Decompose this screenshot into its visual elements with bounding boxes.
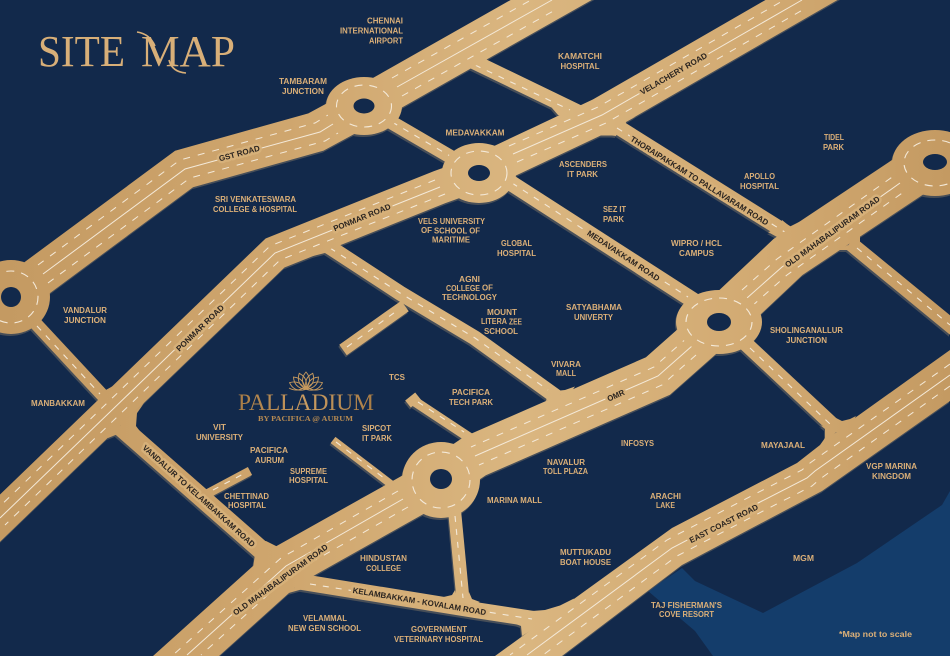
project logo: Palladium: PALLADIUM — [238, 390, 374, 415]
label: Agni College of Technology: TECHNOLOGY — [442, 292, 497, 302]
label: Ascenders IT Park — [559, 159, 607, 179]
label: Pacifica Aurum: PACIFICA — [250, 445, 288, 455]
label: Tambaram Junction: JUNCTION — [282, 86, 324, 96]
label: Vels University School of Maritime: MARITIME — [432, 234, 470, 244]
label: Vels University School of Maritime — [418, 216, 485, 244]
label: Tidel Park: TIDEL — [824, 132, 844, 142]
label: Satyabhama University: UNIVERTY — [574, 312, 613, 322]
label: Agni College of Technology: AGNI — [459, 274, 480, 284]
label: Sipcot IT Park: IT PARK — [362, 433, 393, 443]
road: inner branch — [343, 306, 405, 350]
label: Manbakkam: MANBAKKAM — [31, 398, 85, 408]
label: Mount Litera Zee School: ZEE — [509, 316, 522, 326]
label: Kamatchi Hospital — [558, 51, 602, 71]
roundabout: Tambaram — [326, 77, 402, 135]
label: Government Veterinary Hospital: VETERINARY HOSPITAL — [394, 634, 483, 644]
label: Marina Mall: MARINA MALL — [487, 495, 542, 505]
road label: Thoraipakkam to Pallavaram Road: THORAIPAKKAM TO PALLAVARAM ROAD — [629, 134, 770, 227]
label: Tambaram Junction — [279, 76, 327, 96]
label: Apollo Hospital: HOSPITAL — [740, 181, 779, 191]
label: Muttukadu Boat House: MUTTUKADU — [560, 547, 611, 557]
label: Satyabhama University — [566, 302, 622, 322]
label: Taj Fisherman's Cove Resort: COVE RESORT — [659, 609, 715, 619]
label: SEZ IT Park — [603, 204, 627, 224]
road: Ponmar Road — [0, 173, 479, 547]
label: Government Veterinary Hospital — [394, 624, 483, 644]
roundabout: Sholinganallur — [676, 290, 762, 354]
label: Navalur Toll Plaza: NAVALUR — [547, 457, 586, 467]
road: Chettinad branch — [205, 471, 250, 495]
label: Kamatchi Hospital: KAMATCHI — [558, 51, 602, 61]
label: Government Veterinary Hospital: GOVERNMENT — [411, 624, 468, 634]
label: VIT University: UNIVERSITY — [196, 432, 243, 442]
label: Hindustan College: COLLEGE — [366, 563, 401, 573]
label: Apollo Hospital — [740, 171, 779, 191]
label: Sholinganallur Junction: SHOLINGANALLUR — [770, 325, 844, 335]
label: Agni College of Technology: OF — [482, 282, 493, 292]
road label: Old Mahabalipuram Road north: OLD MAHABALIPURAM ROAD — [783, 194, 882, 269]
label: Sholinganallur Junction — [770, 325, 844, 345]
label: Global Hospital: GLOBAL — [501, 238, 532, 248]
label: Pacifica Tech Park — [449, 387, 494, 407]
road: Ponmar to OMR inner road — [325, 244, 558, 398]
road: East Coast Road — [495, 350, 950, 656]
label: Ascenders IT Park: ASCENDERS — [559, 159, 607, 169]
label: Pacifica Aurum: AURUM — [255, 455, 284, 465]
road: Vandalur junction link — [25, 312, 105, 398]
label: Hindustan College: HINDUSTAN — [360, 553, 407, 563]
label: Vandalur Junction: JUNCTION — [64, 315, 106, 325]
label: Global Hospital — [497, 238, 536, 258]
road label: OMR: OMR — [606, 388, 626, 403]
label: Vivara Mall — [551, 359, 581, 378]
label: Muttukadu Boat House: BOAT HOUSE — [560, 557, 611, 567]
label: Tidel Park: PARK — [823, 142, 845, 152]
road: Sipcot branch — [333, 440, 392, 485]
label: Tidel Park — [823, 132, 845, 152]
label: Vandalur Junction — [63, 305, 108, 325]
label: Sipcot IT Park: SIPCOT — [362, 423, 392, 433]
label: Kamatchi Hospital: HOSPITAL — [560, 61, 600, 71]
project logo: Palladium — [238, 372, 374, 423]
label: Vels University School of Maritime: OF — [421, 225, 432, 235]
label: Mount Litera Zee School: MOUNT — [487, 307, 518, 317]
road labels — [141, 51, 882, 617]
label: Vels University School of Maritime: VELS UNIVERSITY — [418, 216, 485, 226]
label: Sri Venkateswara College & Hospital: SRI VENKATESWARA — [215, 194, 296, 204]
label: Vivara Mall: MALL — [556, 368, 576, 378]
label: Taj Fisherman's Cove Resort — [651, 600, 722, 619]
label: Sipcot IT Park — [362, 423, 393, 443]
label: VGP Marina Kingdom — [866, 461, 917, 481]
label: Velammal New Gen School: NEW GEN SCHOOL — [288, 623, 361, 633]
label: Arachi Lake — [650, 491, 681, 510]
road label: East Coast Road: EAST COAST ROAD — [688, 502, 760, 545]
label: Wipro / HCL Campus: CAMPUS — [679, 248, 714, 258]
label: Ascenders IT Park: IT PARK — [567, 169, 599, 179]
label: Chennai International Airport: AIRPORT — [369, 36, 404, 46]
road: OMR — [441, 322, 719, 479]
label: Vels University School of Maritime: SCHOOL OF — [434, 226, 480, 236]
road label: GST Road: GST ROAD — [218, 144, 261, 163]
road: Pacifica Tech Park branch — [408, 396, 470, 438]
road: Old Mahabalipuram Road south — [153, 460, 452, 656]
road: GST Road — [11, 0, 590, 297]
label: Chettinad Hospital: CHETTINAD — [224, 491, 269, 501]
road: Medavakkam Road — [500, 176, 705, 308]
label: Apollo Hospital: APOLLO — [744, 171, 775, 181]
title: SITE — [38, 27, 125, 76]
road label: Vandalur to Kelambakkam Road: VANDALUR TO KELAMBAKKAM ROAD — [141, 443, 257, 549]
road label: Ponmar Road lower: PONMAR ROAD — [174, 303, 226, 353]
footnote: map not to scale: *Map not to scale — [839, 629, 912, 639]
label: Satyabhama University: SATYABHAMA — [566, 302, 622, 312]
label: MGM: MGM — [793, 553, 814, 563]
label: Medavakkam: MEDAVAKKAM — [446, 128, 504, 138]
road: Tambaram to Medavakkam link — [384, 118, 456, 160]
label: VGP Marina Kingdom: VGP MARINA — [866, 461, 917, 471]
road: Old Mahabalipuram Road north — [719, 159, 935, 322]
label: Navalur Toll Plaza — [543, 457, 588, 476]
label: Global Hospital: HOSPITAL — [497, 248, 536, 258]
label: Chennai International Airport: CHENNAI — [367, 16, 403, 26]
label: Infosys: INFOSYS — [621, 438, 654, 448]
sea — [648, 491, 950, 656]
label: Mount Litera Zee School: SCHOOL — [484, 326, 518, 336]
label: Vivara Mall: VIVARA — [551, 359, 581, 369]
road label: Ponmar Road upper: PONMAR ROAD — [332, 202, 392, 233]
label: Sholinganallur Junction: JUNCTION — [786, 335, 827, 345]
label: Sri Venkateswara College & Hospital — [213, 194, 297, 214]
label: Wipro / HCL Campus: WIPRO / HCL — [671, 238, 722, 248]
road: Kamatchi link — [462, 56, 582, 114]
roundabout: north-east — [892, 130, 950, 196]
label: SEZ IT Park: PARK — [603, 214, 625, 224]
roundabout: Medavakkam — [442, 143, 516, 203]
label: Chettinad Hospital — [224, 491, 269, 510]
road: Shollinganallur to ECR link — [745, 343, 838, 430]
project logo: Palladium: BY PACIFICA @ AURUM — [258, 414, 353, 423]
label: Supreme Hospital: HOSPITAL — [289, 475, 328, 485]
label: TCS: TCS — [389, 372, 405, 382]
label: Velammal New Gen School — [288, 613, 361, 633]
label: Supreme Hospital: SUPREME — [290, 466, 327, 476]
label: Hindustan College — [360, 553, 407, 573]
title: MAP — [141, 27, 235, 76]
label: SEZ IT Park: SEZ IT — [603, 204, 627, 214]
label: Mount Litera Zee School — [481, 307, 522, 336]
road label: Medavakkam Road: MEDAVAKKAM ROAD — [585, 229, 661, 283]
label: Pacifica Aurum — [250, 445, 288, 465]
road: Velachery Road — [479, 0, 850, 173]
road junction fillets — [97, 104, 860, 636]
label: Mayajaal: MAYAJAAL — [761, 440, 805, 450]
label: VIT University — [196, 422, 243, 442]
label: Vandalur Junction: VANDALUR — [63, 305, 108, 315]
label: Chettinad Hospital: HOSPITAL — [228, 500, 266, 510]
road: Navalur south link — [454, 505, 464, 610]
road: OMR to ECR link — [845, 237, 950, 335]
label: Navalur Toll Plaza: TOLL PLAZA — [543, 466, 588, 476]
label: Arachi Lake: ARACHI — [650, 491, 681, 501]
icon: lotus — [288, 372, 324, 393]
label: Tambaram Junction: TAMBARAM — [279, 76, 327, 86]
label: Supreme Hospital — [289, 466, 328, 485]
title — [38, 27, 235, 76]
label: Pacifica Tech Park: TECH PARK — [449, 397, 494, 407]
label: Chennai International Airport: INTERNATIONAL — [340, 26, 403, 36]
label: Chennai International Airport — [340, 16, 404, 46]
road: Thoraipakkam to Pallavaram Road — [610, 122, 795, 238]
road label: Old Mahabalipuram Road south: OLD MAHABALIPURAM ROAD — [231, 542, 330, 617]
road label: Velachery Road: VELACHERY ROAD — [639, 51, 709, 97]
label: Agni College of Technology: COLLEGE — [446, 283, 480, 293]
roundabout: Navalur — [402, 442, 480, 518]
label: Mount Litera Zee School: LITERA — [481, 316, 507, 326]
roundabout: Vandalur — [0, 260, 50, 334]
road: Kelambakkam - Kovalam Road — [296, 581, 560, 623]
label: Agni College of Technology — [442, 274, 497, 302]
road: Vandalur to Kelambakkam Road — [120, 426, 268, 556]
label: Pacifica Tech Park: PACIFICA — [452, 387, 490, 397]
label: Sri Venkateswara College & Hospital: COLLEGE & HOSPITAL — [213, 204, 297, 214]
label: Muttukadu Boat House — [560, 547, 611, 567]
label: Taj Fisherman's Cove Resort: TAJ FISHERMAN'S — [651, 600, 722, 610]
label: Arachi Lake: LAKE — [656, 500, 675, 510]
label: Wipro / HCL Campus — [671, 238, 722, 258]
road label: Kelambakkam - Kovalam Road: KELAMBAKKAM - KOVALAM ROAD — [352, 586, 487, 617]
label: VGP Marina Kingdom: KINGDOM — [872, 471, 911, 481]
label: VIT University: VIT — [213, 422, 227, 432]
label: Velammal New Gen School: VELAMMAL — [303, 613, 347, 623]
